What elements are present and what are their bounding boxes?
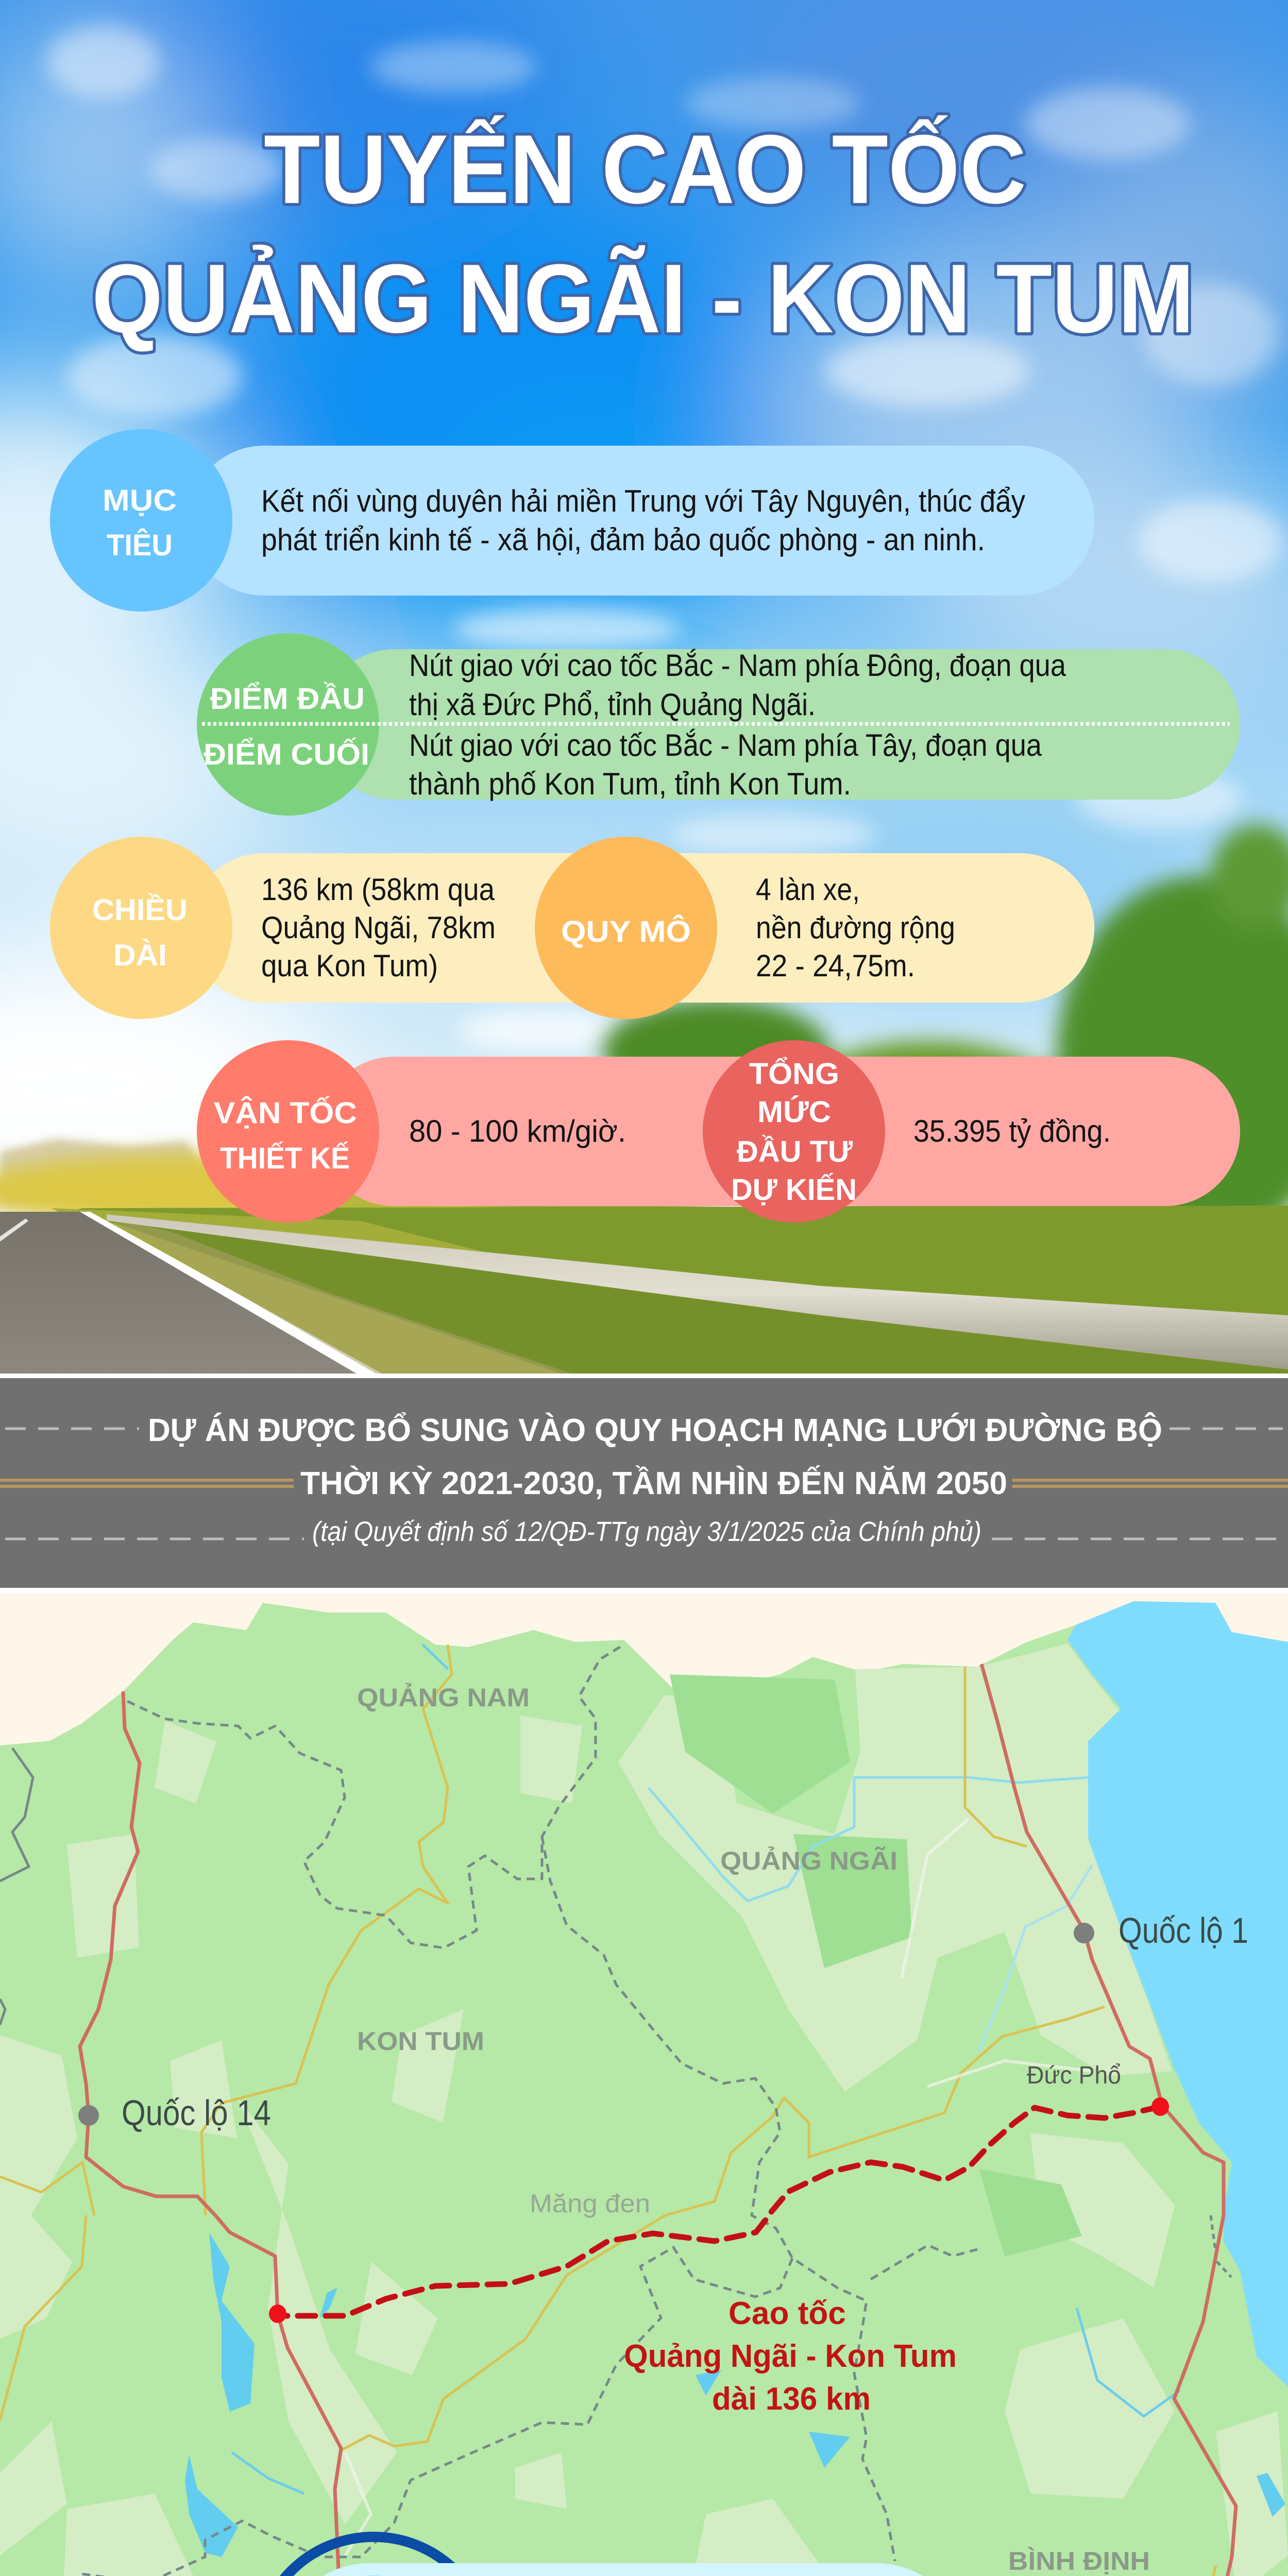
panel: chiều dài và quy mô: 136 km (58km qua (261, 872, 495, 907)
map labels: national highways: Quốc lộ 14 (122, 2093, 271, 2133)
label: tổng mức đầu tư dự kiến: TỔNG (749, 1057, 839, 1091)
map labels: provinces: QUẢNG NAM (357, 1683, 530, 1712)
map labels: provinces: QUẢNG NGÃI (720, 1846, 897, 1875)
label: tổng mức đầu tư dự kiến: MỨC (757, 1095, 831, 1129)
panel: mục tiêu (50, 429, 1094, 612)
panel: điểm đầu, điểm cuối: thành phố Kon Tum, tỉnh Kon Tum. (409, 767, 851, 801)
map labels: provinces: KON TUM (357, 2027, 484, 2056)
panel: điểm đầu, điểm cuối: Nút giao với cao tốc Bắc - Nam phía Đông, đoạn qua (409, 648, 1066, 683)
map label: expressway: Cao tốc (728, 2296, 846, 2331)
label: mục tiêu (50, 429, 232, 612)
label: quy mô (535, 837, 717, 1019)
panel: vận tốc và tổng mức đầu tư: 80 - 100 km/giờ. (409, 1114, 626, 1148)
background: cream behind map (0, 1593, 1288, 2057)
background: sky and highway photo (0, 0, 1288, 1378)
label: điểm đầu điểm cuối: ĐIỂM CUỐI (204, 738, 369, 771)
label: vận tốc thiết kế: THIẾT KẾ (220, 1142, 350, 1175)
label: mục tiêu: MỤC (103, 484, 177, 517)
heading: quy hoạch: THỜI KỲ 2021-2030, TẦM NHÌN ĐẾN NĂM 2050 (300, 1466, 1007, 1501)
map labels: provinces: Đức Phổ (1027, 2062, 1121, 2089)
label: điểm đầu điểm cuối: ĐIỂM ĐẦU (210, 682, 365, 716)
label: điểm đầu điểm cuối (197, 633, 379, 816)
label: chiều dài (50, 837, 232, 1019)
panel: vận tốc và tổng mức đầu tư (197, 1040, 1240, 1223)
panel: mục tiêu: phát triển kinh tế - xã hội, đảm bảo quốc phòng - an ninh. (261, 522, 985, 557)
heading: quy hoạch (148, 1412, 1162, 1501)
map label: expressway: Quảng Ngãi - Kon Tum (624, 2338, 957, 2374)
map label: expressway (624, 2296, 957, 2417)
label: tổng mức đầu tư dự kiến: ĐẦU TƯ (737, 1135, 853, 1168)
heading: quy hoạch: DỰ ÁN ĐƯỢC BỔ SUNG VÀO QUY HOẠCH MẠNG LƯỚI ĐƯỜNG BỘ (148, 1412, 1162, 1448)
banner: road band (0, 1374, 1288, 1593)
label: chiều dài: DÀI (113, 939, 167, 972)
panel: chiều dài và quy mô: Quảng Ngãi, 78km (261, 910, 496, 945)
panel: điểm đầu, điểm cuối: Nút giao với cao tốc Bắc - Nam phía Tây, đoạn qua (409, 728, 1042, 762)
title (92, 115, 1194, 353)
map labels: provinces (357, 1683, 1150, 2575)
map labels: national highways (122, 1910, 1248, 2133)
label: chiều dài: CHIỀU (92, 893, 188, 927)
label: vận tốc thiết kế: VẬN TỐC (214, 1096, 357, 1130)
panel: mục tiêu: Kết nối vùng duyên hải miền Trung với Tây Nguyên, thúc đẩy (261, 484, 1025, 518)
note: quyết định: (tại Quyết định số 12/QĐ-TTg ngày 3/1/2025 của Chính phủ) (312, 1516, 981, 1547)
title: QUẢNG NGÃI - KON TUM (92, 244, 1194, 353)
label: vận tốc thiết kế (197, 1040, 379, 1223)
map label: expressway: dài 136 km (712, 2381, 871, 2417)
panel: điểm đầu, điểm cuối: thị xã Đức Phổ, tỉnh Quảng Ngãi. (409, 687, 816, 722)
map labels: national highways: Quốc lộ 1 (1118, 1910, 1248, 1951)
panel: chiều dài và quy mô: qua Kon Tum) (261, 948, 438, 983)
label: mục tiêu: TIÊU (107, 529, 173, 562)
panel: điểm đầu, điểm cuối (197, 633, 1240, 816)
callout 1: economic corridor (257, 2537, 967, 2576)
panel: chiều dài và quy mô: nền đường rộng (756, 910, 955, 945)
map labels: provinces: Măng đen (530, 2189, 650, 2218)
panel: chiều dài và quy mô (50, 837, 1094, 1019)
map labels: provinces: BÌNH ĐỊNH (1008, 2547, 1150, 2575)
label: tổng mức đầu tư dự kiến (703, 1040, 885, 1223)
panel: vận tốc và tổng mức đầu tư: 35.395 tỷ đồng. (913, 1114, 1111, 1148)
panel: chiều dài và quy mô: 4 làn xe, (756, 872, 860, 907)
map (0, 1601, 1288, 2576)
background: lower sky, fields and highway photo (0, 2056, 1288, 2576)
panel: chiều dài và quy mô: 22 - 24,75m. (756, 948, 915, 983)
label: tổng mức đầu tư dự kiến: DỰ KIẾN (731, 1173, 857, 1207)
label: quy mô: QUY MÔ (561, 915, 691, 948)
title: TUYẾN CAO TỐC (264, 115, 1026, 224)
